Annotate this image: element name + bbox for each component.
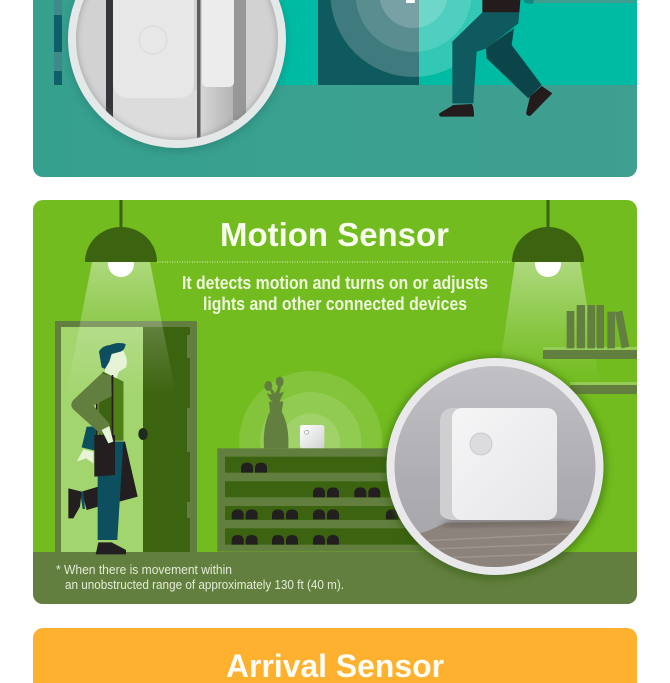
window sill [533,0,635,3]
door frame [55,321,197,552]
light cone right [501,262,598,372]
dotted divider [157,262,510,263]
contact sensor photo circle [60,0,300,152]
motion sensor photo circle [384,357,606,580]
shoe cabinet [217,448,431,552]
vase with flowers [264,377,288,448]
door opening [61,327,143,552]
footnote [56,563,344,592]
sensor body [440,408,461,520]
footnote: * When there is movement within [56,563,232,577]
window stripes [54,0,62,85]
books [567,305,629,348]
sensor shadow [440,520,575,527]
subtitle: lights and other connected devices [203,293,467,314]
lamp left [85,200,157,277]
teal wall [276,0,637,85]
walking person [439,0,552,117]
door knob [138,428,148,440]
floor band [33,552,637,604]
sensor lens [470,433,492,455]
footnote: an unobstructed range of approximately 130 ft (40 m). [65,578,344,592]
light cone left [70,262,173,382]
signal rings [330,0,496,77]
arrival sensor title: Arrival Sensor [226,648,444,683]
shoes [232,463,398,545]
title: Motion Sensor [220,216,449,253]
wooden table [420,520,580,567]
signal rings and tiny sensor [239,371,382,448]
panel: contact sensor scene [33,0,637,177]
subtitle [182,272,488,314]
lamp right [512,200,584,277]
person entering [68,343,138,554]
panel: arrival sensor [33,628,637,683]
dark doorway [318,0,419,85]
shelves on right wall [543,347,637,394]
subtitle: It detects motion and turns on or adjusts [182,272,488,293]
panel: motion sensor [33,200,637,604]
open door [143,327,190,552]
